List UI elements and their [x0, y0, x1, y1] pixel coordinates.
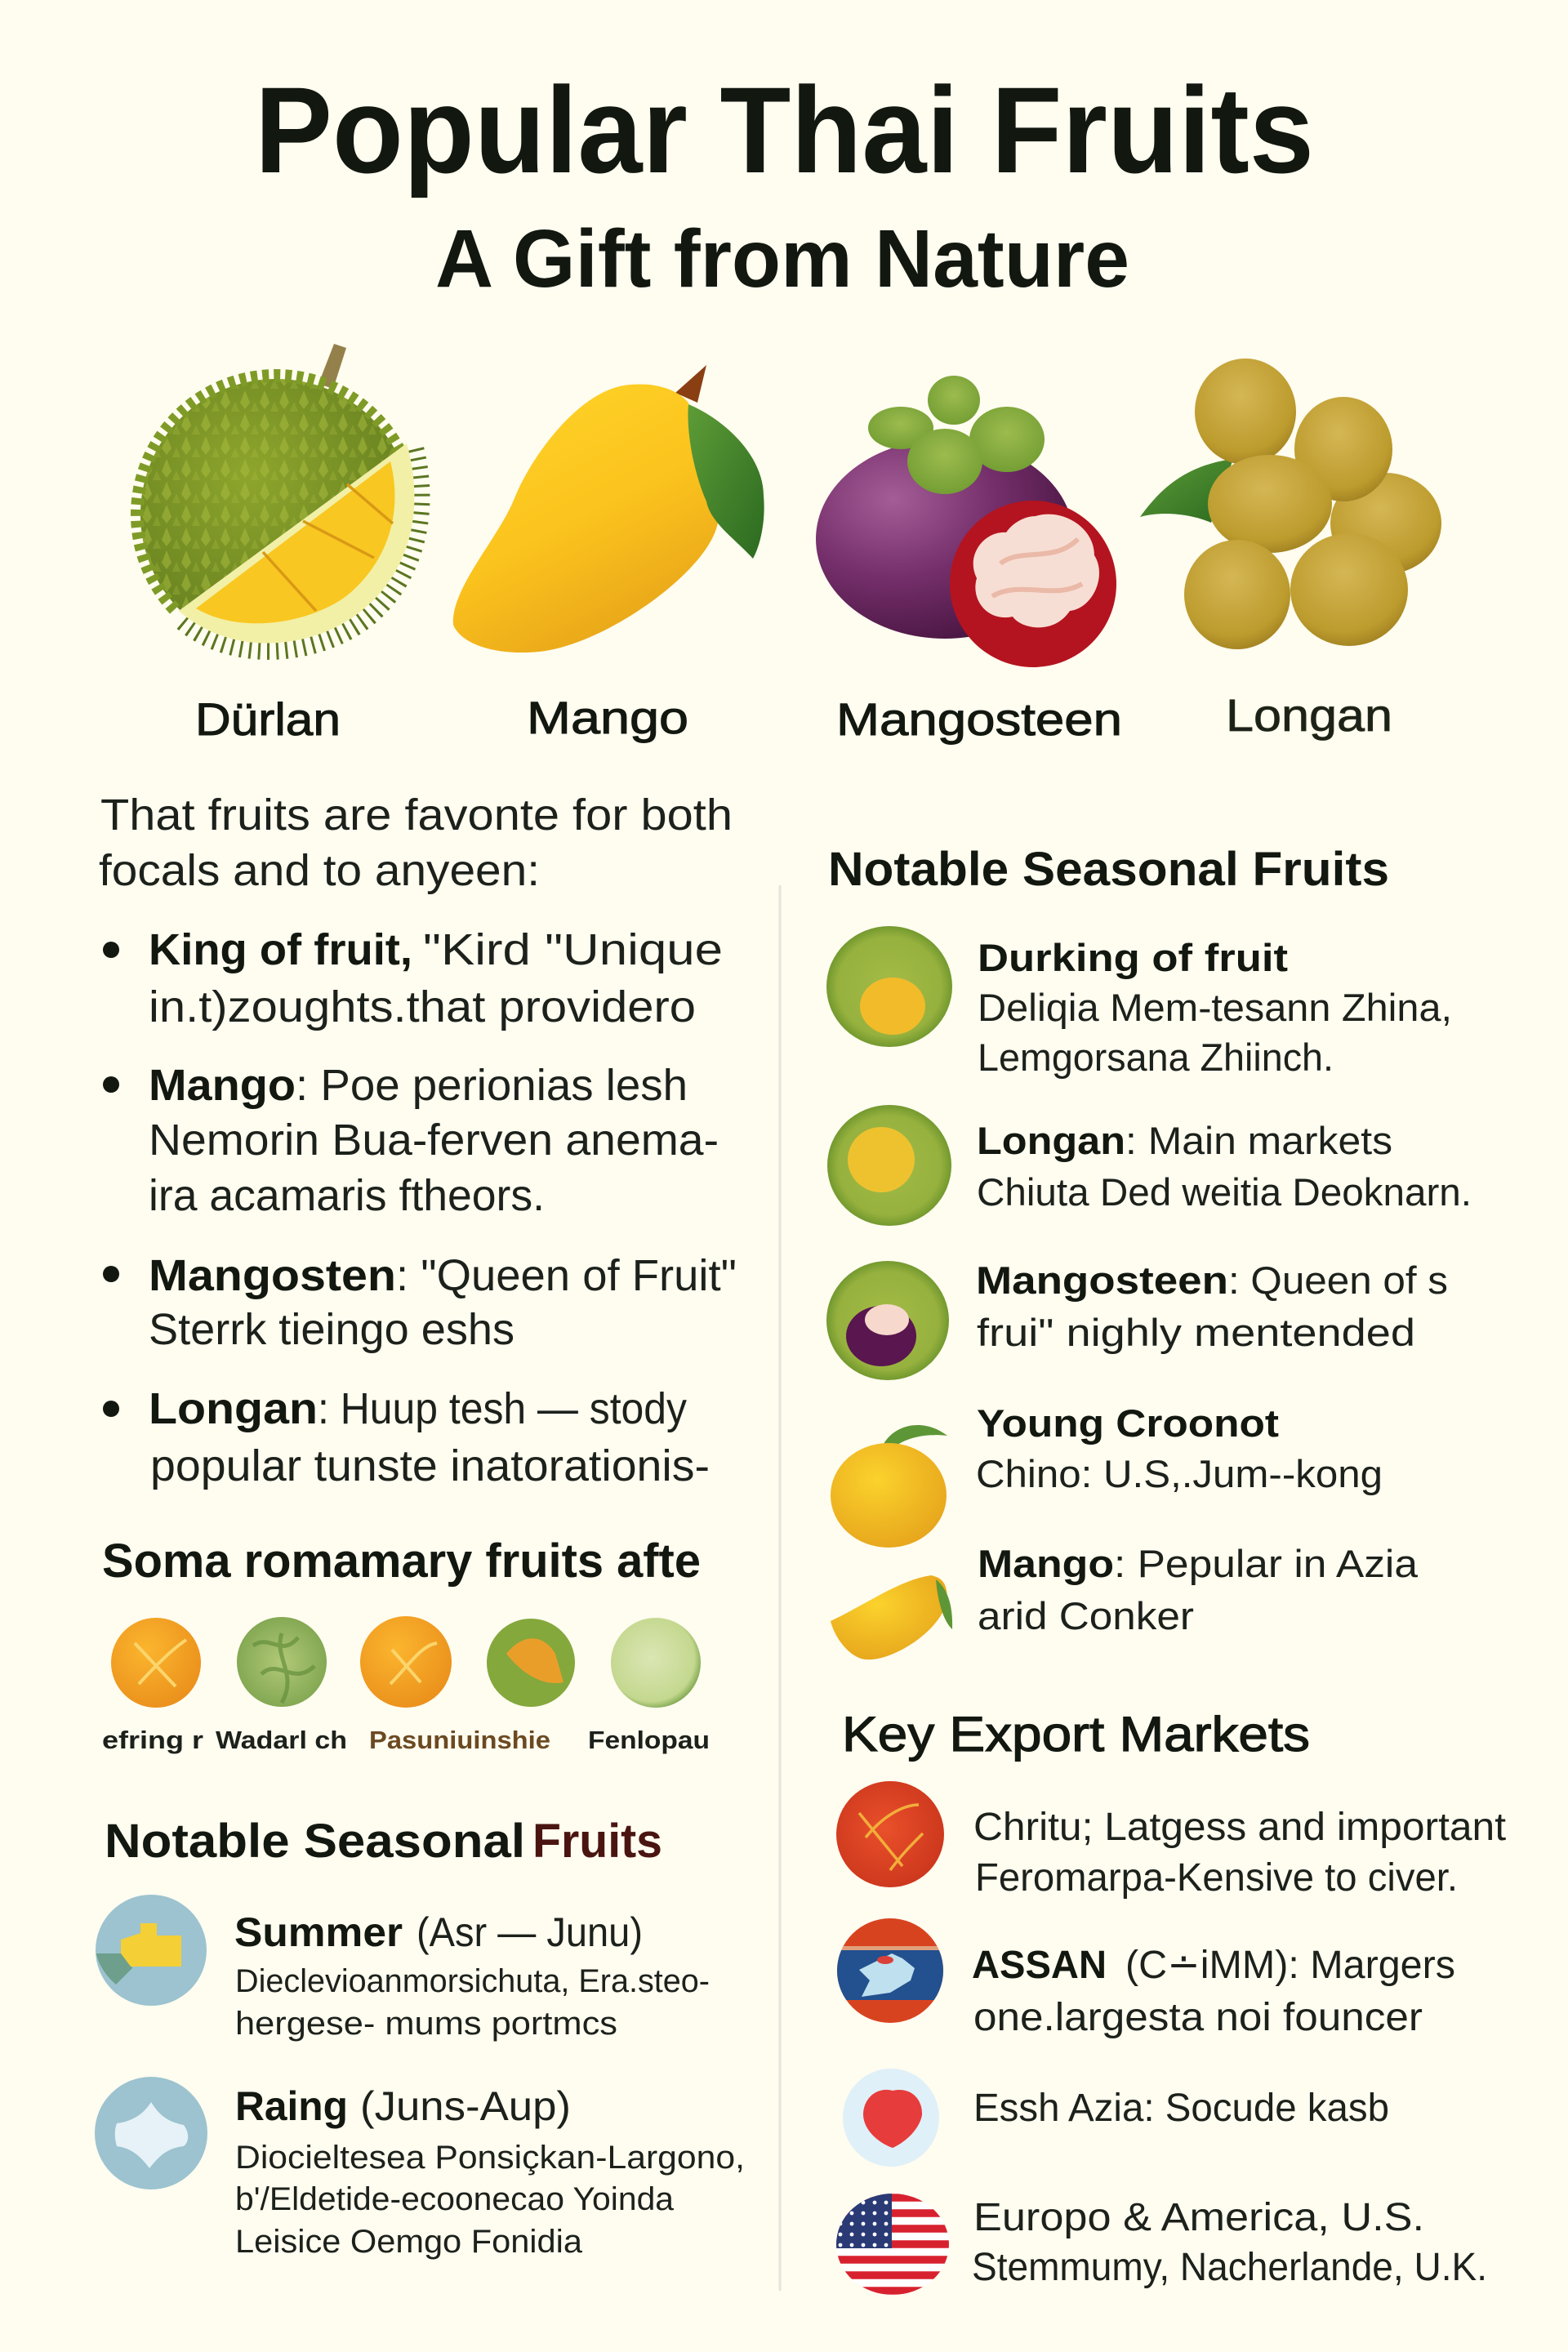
- bullet: longan: : Huup tesh — stody: [318, 1384, 687, 1433]
- panel: longan item: : Main markets: [1125, 1119, 1392, 1162]
- panel: mango item: arid Conker: [978, 1594, 1194, 1637]
- intro paragraph: focals and to anyeen:: [99, 846, 540, 895]
- icon: east asia: [843, 2069, 939, 2167]
- icon: summer: [96, 1895, 207, 2006]
- panel: summer season: [96, 1895, 710, 2042]
- panel: summer season: hergese- mums portmcs: [235, 2006, 617, 2042]
- icon: yellow fruit: [831, 1425, 947, 1548]
- panel: china market: [836, 1781, 1506, 1900]
- heading: key export markets: Key Export Markets: [842, 1707, 1310, 1762]
- bullet: mango: Mango: [149, 1061, 296, 1110]
- panel: small fruit row: [102, 1616, 710, 1754]
- panel: longan item: [827, 1105, 1472, 1226]
- bullet: king of fruit: King of fruit,: [149, 925, 412, 974]
- panel: mangosteen item: frui" nighly mentended: [977, 1311, 1415, 1354]
- icon: rain: [95, 2077, 207, 2189]
- panel: rainy season: Raing: [235, 2083, 348, 2129]
- panel: rainy season: b'/Eldetide-ecoonecao Yoinda: [235, 2181, 675, 2217]
- icon: orange fruit 3: [360, 1616, 452, 1708]
- bullet: mango: Nemorin Bua-ferven anema-: [149, 1116, 719, 1165]
- panel: asean market: ASSAN: [972, 1944, 1107, 1987]
- panel: young coconut item: Young Croonot: [977, 1401, 1279, 1445]
- panel: longan item: Chiuta Ded weitia Deoknarn.: [977, 1170, 1472, 1214]
- panel: durian item: [826, 926, 1452, 1079]
- panel: mangosteen item: Mangosteen: [976, 1258, 1228, 1302]
- bullet: mango: : Poe perionias lesh: [296, 1061, 688, 1110]
- panel: mangosteen item: : Queen of s: [1228, 1258, 1448, 1302]
- bullet: mangosteen: : "Queen of Fruit": [396, 1251, 737, 1300]
- label: fruit 1: efring r: [102, 1726, 203, 1754]
- label: fruit 2: Wadarl ch: [216, 1726, 347, 1754]
- intro paragraph: That fruits are favonte for both: [100, 791, 733, 840]
- panel: durian item: Deliqia Mem-tesann Zhina,: [978, 986, 1452, 1029]
- panel: summer season: Summer: [234, 1909, 403, 1955]
- panel: summer season: (Asr — Junu): [416, 1909, 643, 1955]
- icon: mangosteen: [816, 376, 1116, 667]
- panel: asean market: (C∸iMM): Margers: [1125, 1944, 1455, 1987]
- panel: young coconut item: Chino: U.S,.Jum--kong: [976, 1452, 1383, 1495]
- panel: east asia market: [843, 2069, 1389, 2167]
- icon: green fruit 2: [237, 1617, 327, 1707]
- panel: europe america market: [833, 2194, 1487, 2296]
- title: Popular Thai Fruits: [255, 61, 1314, 198]
- panel: mango item: [831, 1542, 1419, 1659]
- bullet: mangosteen: Sterrk tieingo eshs: [149, 1305, 514, 1354]
- panel: durian item: Lemgorsana Zhiinch.: [978, 1036, 1334, 1079]
- panel: durian item: Durking of fruit: [978, 936, 1288, 979]
- panel: young coconut item: [831, 1401, 1383, 1548]
- panel: east asia market: Essh Azia: Socude kasb: [973, 2087, 1389, 2130]
- bullet: king of fruit: "Kird "Unique: [423, 925, 723, 974]
- panel: mangosteen item: [826, 1258, 1448, 1380]
- panel: rainy season: Diocieltesea Ponsiçkan-Largono,: [235, 2140, 745, 2176]
- heading: seasonal fruits right: Notable Seasonal Fruits: [828, 843, 1389, 896]
- label: mangosteen: Mangosteen: [836, 693, 1122, 745]
- panel: mango item: : Pepular in Azia: [1114, 1542, 1419, 1585]
- bullet: king of fruit: [103, 925, 723, 1031]
- panel: longan item: Longan: [977, 1119, 1125, 1162]
- icon: orange fruit 1: [111, 1618, 201, 1708]
- icon: small mango: [831, 1575, 952, 1659]
- icon: mango: [453, 365, 764, 653]
- icon: longan round: [827, 1105, 951, 1226]
- icon: mangosteen round: [826, 1261, 949, 1380]
- panel: summer season: Dieclevioanmorsichuta, Era.steo-: [235, 1963, 710, 1999]
- heading: seasonal fruits left: Notable Seasonal: [105, 1815, 525, 1868]
- label: fruit 3: Pasuniuinshie: [369, 1726, 550, 1754]
- panel: rainy season: Leisice Oemgo Fonidia: [235, 2224, 583, 2260]
- panel: mango item: Mango: [978, 1542, 1114, 1585]
- subtitle: A Gift from Nature: [435, 213, 1129, 305]
- bullet: longan: [103, 1384, 710, 1490]
- label: durian: Dürlan: [195, 693, 341, 745]
- label: mango: Mango: [527, 692, 688, 743]
- heading: seasonal fruits left: Fruits: [532, 1815, 662, 1868]
- bullet: mangosteen: [103, 1251, 737, 1354]
- icon: longan: [1140, 359, 1441, 649]
- label: fruit 4: Fenlopau: [588, 1726, 710, 1754]
- bullet: longan: Longan: [149, 1384, 318, 1433]
- panel: china market: Chritu; Latgess and important: [973, 1806, 1506, 1849]
- intro paragraph: [99, 791, 733, 895]
- panel: rainy season: (Juns-Aup): [360, 2083, 571, 2129]
- heading: some fruits: Soma romamary fruits afte: [102, 1535, 701, 1588]
- icon: us flag: [833, 2194, 952, 2296]
- icon: green orange fruit 4: [487, 1619, 575, 1707]
- panel: china market: Feromarpa-Kensive to civer.: [975, 1856, 1458, 1900]
- bullet: mango: ira acamaris ftheors.: [149, 1171, 545, 1220]
- panel: asean market: one.largesta noi founcer: [973, 1996, 1423, 2039]
- panel: rainy season: [95, 2077, 745, 2260]
- panel: europe america market: Stemmumy, Nacherlande, U.K.: [972, 2246, 1487, 2289]
- icon: durian: [137, 344, 419, 653]
- bullet: mangosteen: Mangosten: [149, 1251, 396, 1300]
- bullet: mango: [103, 1061, 719, 1220]
- panel: europe america market: Europo & America, U.S.: [973, 2196, 1424, 2239]
- panel: asean market: [833, 1915, 1455, 2039]
- icon: asean flag: [837, 1918, 943, 2023]
- icon: china: [836, 1781, 944, 1887]
- icon: durian round: [826, 926, 952, 1047]
- label: longan: Longan: [1226, 689, 1392, 741]
- bullet list: [103, 925, 737, 1490]
- icon: pale green fruit 5: [611, 1618, 701, 1708]
- bullet: king of fruit: in.t)zoughts.that providero: [149, 982, 696, 1031]
- bullet: longan: popular tunste inatorationis-: [150, 1441, 710, 1490]
